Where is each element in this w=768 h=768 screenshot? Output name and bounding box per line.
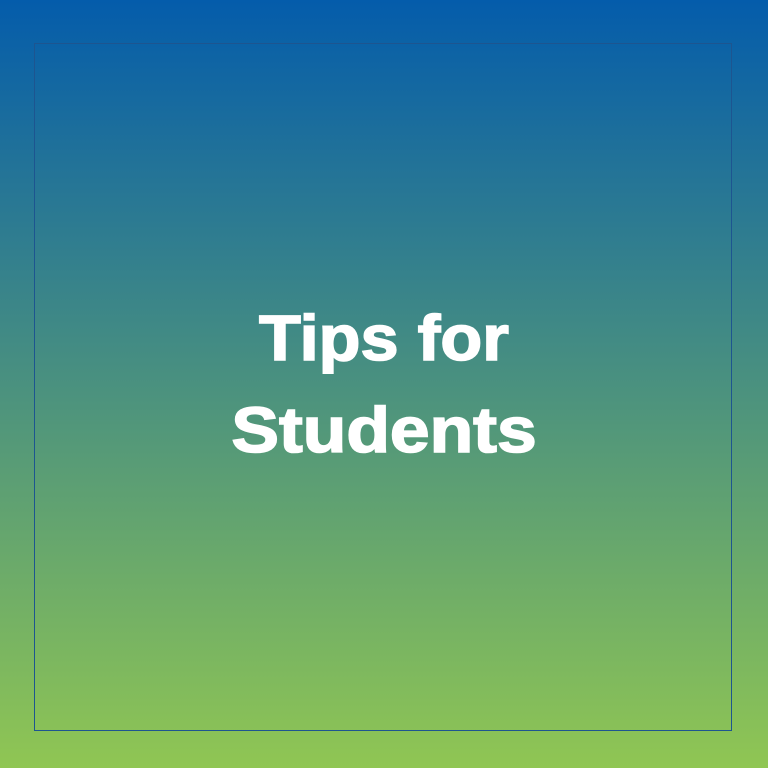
- title: [231, 302, 537, 466]
- title: Students: [231, 394, 537, 466]
- title: Tips for: [259, 302, 509, 374]
